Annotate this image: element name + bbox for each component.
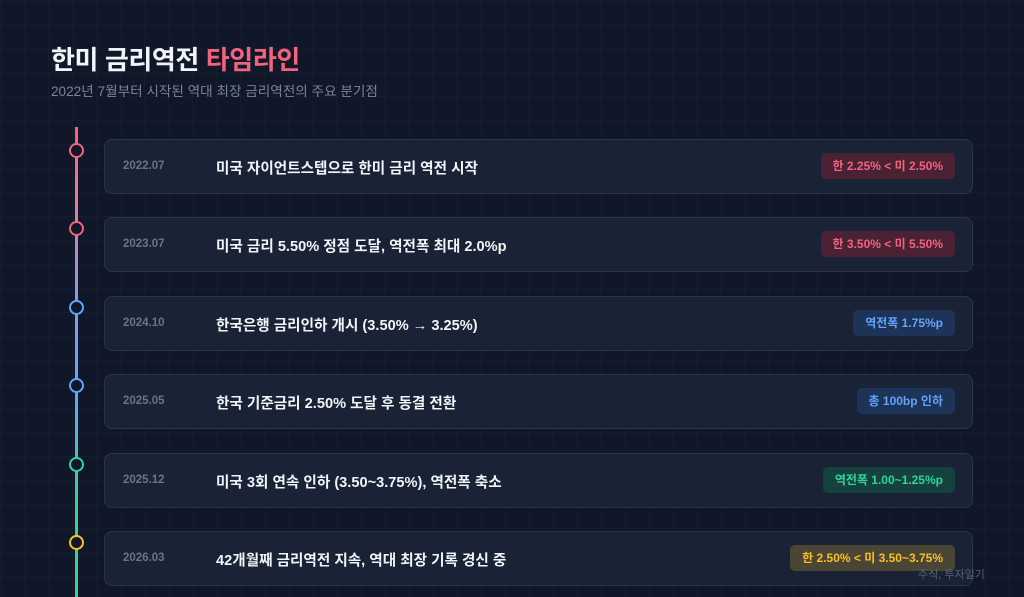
card 2026.03: 한 2.50% < 미 3.50~3.75%: [802, 551, 943, 565]
card 2026.03: [104, 531, 973, 586]
card 2026.03: 42개월째 금리역전 지속, 역대 최장 기록 경신 중: [216, 553, 506, 569]
dot 1: [69, 143, 84, 158]
card 2026.03: 2026.03: [123, 552, 165, 564]
card 2025.05: [104, 374, 973, 429]
timeline line: [75, 127, 78, 597]
card 2022.07: 2022.07: [123, 160, 165, 172]
card 2023.07: 2023.07: [123, 238, 165, 250]
card 2025.12: 2025.12: [123, 474, 165, 486]
card 2025.12: 미국 3회 연속 인하 (3.50~3.75%), 역전폭 축소: [216, 475, 502, 491]
card 2025.05: 2025.05: [123, 395, 165, 407]
card 2022.07: 미국 자이언트스텝으로 한미 금리 역전 시작: [216, 161, 478, 177]
subtitle: 2022년 7월부터 시작된 역대 최장 금리역전의 주요 분기점: [51, 84, 378, 99]
card 2025.05: 한국 기준금리 2.50% 도달 후 동결 전환: [216, 396, 456, 412]
card 2023.07: 미국 금리 5.50% 정점 도달, 역전폭 최대 2.0%p: [216, 239, 507, 255]
card 2022.07: 한 2.25% < 미 2.50%: [833, 159, 943, 173]
dot 4: [69, 378, 84, 393]
card 2023.07: 한 3.50% < 미 5.50%: [833, 237, 943, 251]
watermark: 주식, 투자일기: [918, 569, 985, 581]
card 2024.10: 역전폭 1.75%p: [865, 316, 943, 330]
card 2024.10: 한국은행 금리인하 개시 (3.50% → 3.25%): [216, 318, 478, 334]
dot 5: [69, 457, 84, 472]
card 2024.10: [104, 296, 973, 351]
card 2023.07: [104, 217, 973, 272]
dot 3: [69, 300, 84, 315]
dot 2: [69, 221, 84, 236]
title: 한미 금리역전 타임라인: [51, 45, 300, 75]
dot 6: [69, 535, 84, 550]
card 2024.10: 2024.10: [123, 317, 165, 329]
card 2025.12: 역전폭 1.00~1.25%p: [835, 473, 943, 487]
card 2022.07: [104, 139, 973, 194]
card 2025.05: 총 100bp 인하: [869, 394, 943, 408]
card 2025.12: [104, 453, 973, 508]
